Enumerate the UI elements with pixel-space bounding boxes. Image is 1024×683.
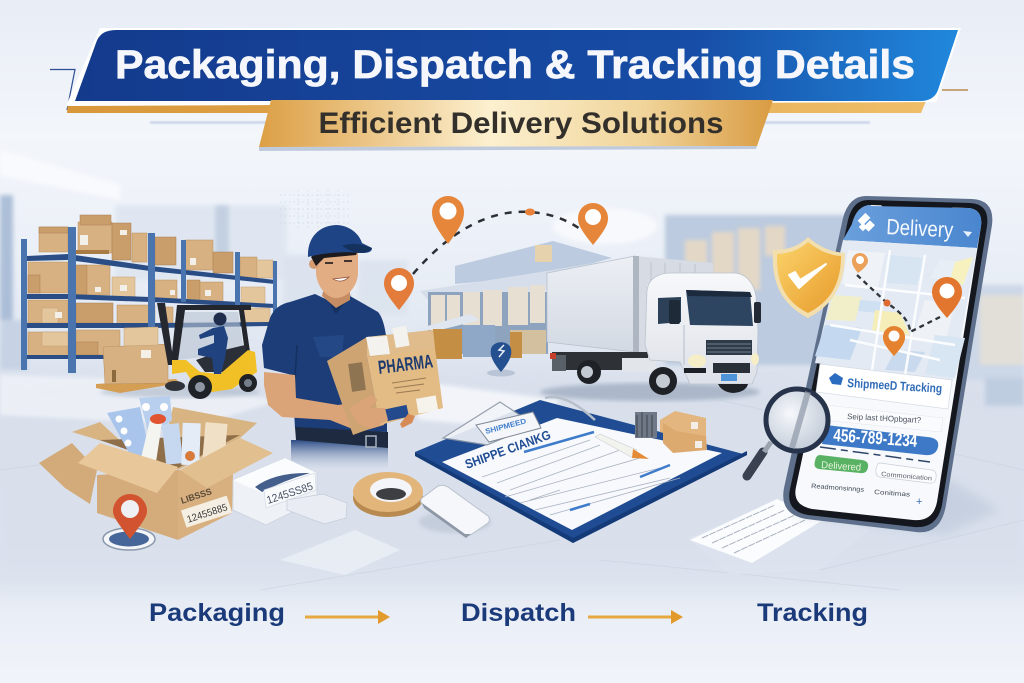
white parcel with barcode: 1245SS85 (265, 481, 315, 507)
dot grid decoration (280, 190, 352, 228)
arrow: packaging to dispatch (305, 610, 390, 624)
location pin on base (103, 494, 155, 550)
blurred background: warehouse hall left (0, 195, 408, 370)
front wheels (649, 367, 677, 395)
pallet (96, 379, 180, 393)
white power bank (419, 485, 491, 538)
barcode label: LIBSSS (179, 486, 213, 506)
barcode label (177, 482, 232, 528)
pin top right (578, 203, 608, 245)
cab (645, 273, 761, 384)
box labels (55, 230, 211, 318)
gold shield with check (773, 237, 845, 318)
forklift (96, 303, 260, 399)
awning and door (413, 314, 480, 330)
track input label: Seip last tHOpbgart? (847, 412, 922, 425)
bottom status text (811, 483, 922, 508)
step label: Dispatch: Dispatch (461, 599, 576, 627)
map (815, 240, 977, 381)
open cardboard box with medicines (39, 396, 273, 540)
yellow body (172, 350, 257, 392)
pin top middle (432, 196, 464, 244)
hand (349, 395, 388, 428)
smartphone tracking app (783, 196, 1000, 535)
title banner (50, 28, 968, 113)
phone body (783, 196, 992, 532)
cab frame (171, 305, 251, 362)
torso (262, 294, 387, 432)
boxes on forklift (103, 327, 168, 384)
subtitle ribbon (150, 100, 870, 151)
paper (442, 418, 722, 530)
bottom status text: Conitimas (874, 489, 911, 499)
wheels (165, 374, 257, 399)
belt (295, 427, 388, 448)
small blue location marker (487, 342, 515, 376)
app header: Delivery (886, 214, 954, 242)
delivery man (262, 225, 388, 470)
arm (264, 372, 388, 432)
delivery truck (540, 256, 761, 401)
main title: Packaging, Dispatch & Tracking Details (115, 43, 915, 87)
medicines (107, 396, 228, 465)
boxes on shelves (28, 215, 273, 356)
app header (843, 205, 981, 248)
shipment tracking card (816, 364, 952, 409)
clip: SHIPMEED (484, 416, 528, 436)
distribution building (413, 241, 612, 359)
floor tiles (0, 400, 1024, 590)
clip (443, 397, 595, 445)
bottom status text: + (916, 496, 922, 508)
screen (795, 205, 981, 520)
magnifying glass (747, 389, 828, 476)
notch (880, 204, 955, 214)
tracking number pill: 456-789-1234 (833, 425, 918, 451)
PHARMA box (327, 326, 443, 435)
phone shadow (790, 480, 1000, 535)
status pill: Commonication (881, 471, 933, 482)
form lines (482, 440, 680, 515)
stapler (635, 412, 657, 438)
subtitle ribbon: Efficient Delivery Solutions (318, 107, 724, 140)
flaps (78, 443, 178, 493)
neck and face (309, 245, 360, 308)
packing tape roll (353, 472, 423, 517)
faint form on floor (280, 530, 400, 575)
clipboard with shipping form (415, 397, 747, 543)
route (857, 275, 940, 332)
bottom status text: Readmonsinngs (811, 483, 865, 494)
blurred background: building right (553, 208, 1024, 406)
printed document at bottom (688, 499, 870, 575)
driver (198, 312, 228, 374)
pin left (384, 268, 414, 310)
mast (157, 303, 174, 365)
track input label (822, 405, 943, 432)
box back flaps and interior (72, 407, 257, 470)
step label: Tracking: Tracking (757, 599, 868, 627)
cap (308, 225, 372, 257)
form title: SHIPPE CIANKG (463, 427, 553, 472)
cargo box (547, 256, 713, 353)
box body (97, 470, 178, 540)
floor shadow (100, 386, 260, 398)
warehouse shelving with boxes (21, 215, 277, 373)
arrow: dispatch to tracking (588, 610, 683, 624)
white parcel with barcode (233, 458, 347, 525)
small stacked boxes (660, 411, 707, 453)
barcode label: 12455885 (186, 502, 229, 526)
delivered badge (814, 455, 868, 474)
shelf beams (27, 254, 275, 359)
shipment tracking card: ShipmeeD Tracking (847, 376, 942, 396)
rear wheel (577, 360, 601, 384)
step label: Packaging: Packaging (149, 599, 285, 627)
shelf uprights (21, 227, 277, 373)
status pill (876, 463, 936, 483)
trousers (291, 440, 388, 470)
route pins with dashed path (384, 196, 608, 310)
PHARMA label: PHARMA (377, 351, 434, 379)
chassis (552, 352, 648, 370)
pencil (595, 434, 649, 459)
delivered badge: Delivered (821, 460, 861, 474)
folded box at left (39, 443, 97, 504)
blue form fields (524, 432, 670, 510)
